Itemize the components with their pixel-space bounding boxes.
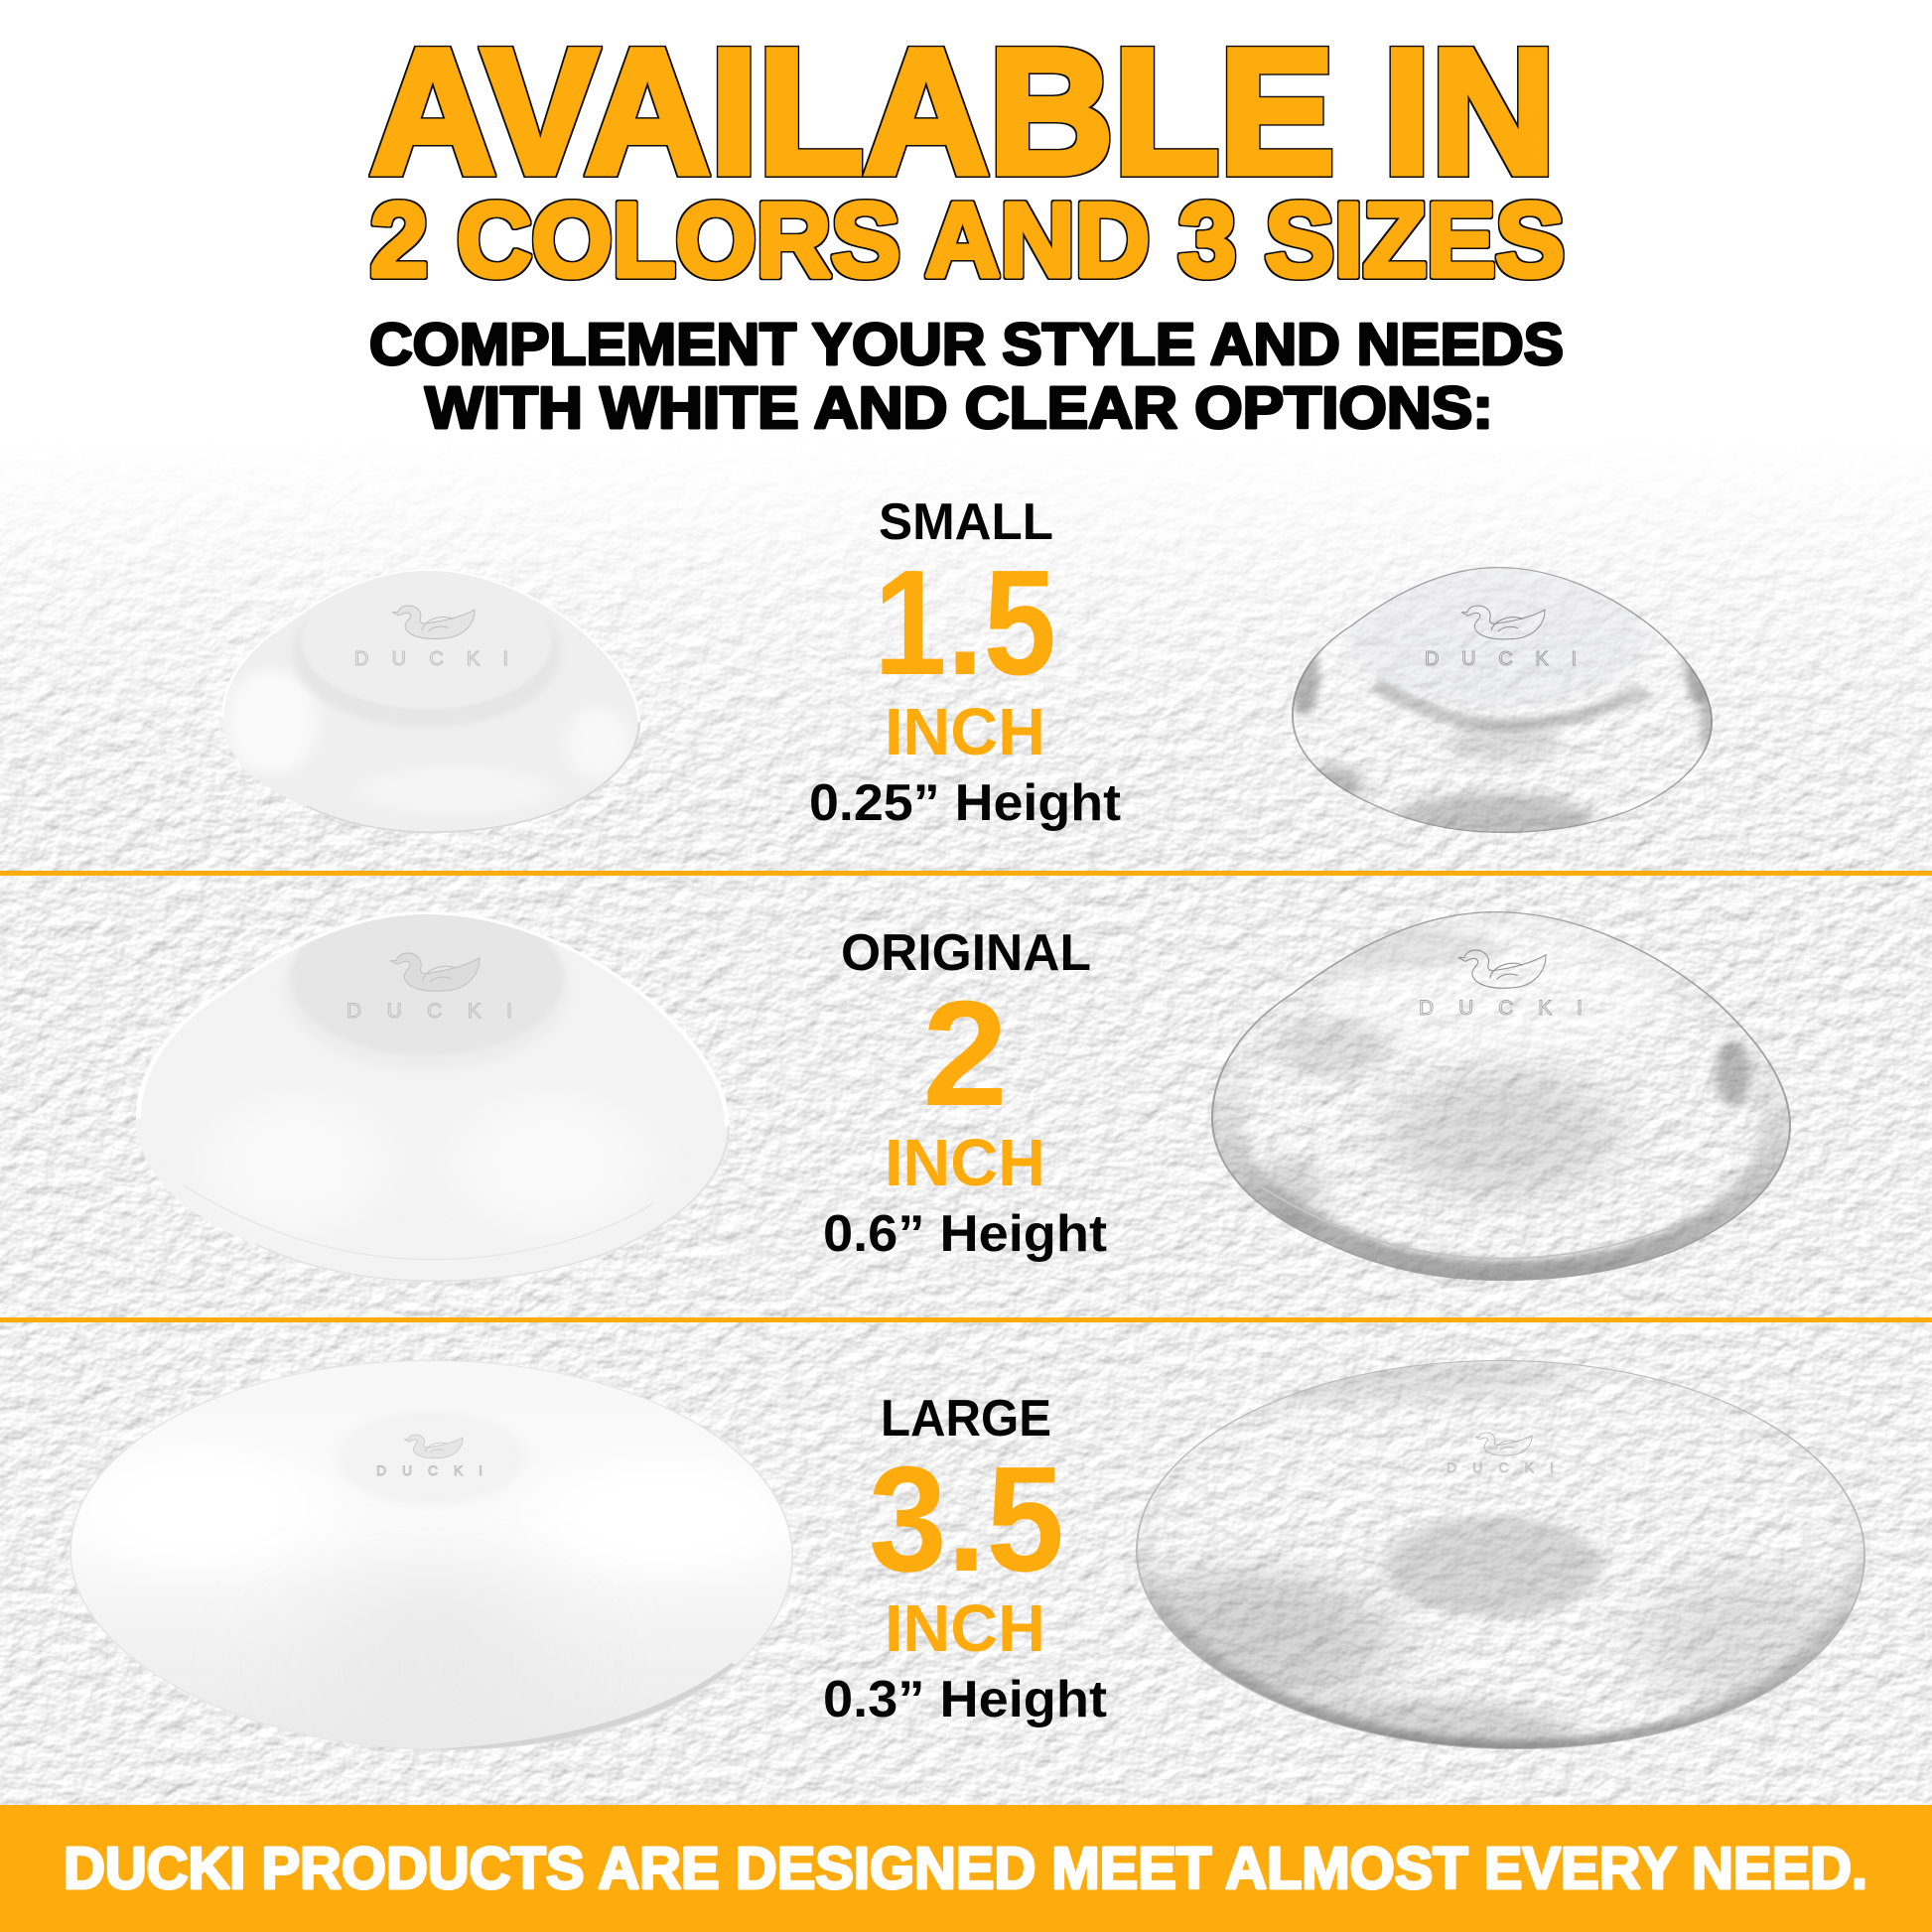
diameter number: 3.5 [869, 1435, 1064, 1602]
title [370, 12, 1565, 299]
panel: original size [136, 900, 1791, 1282]
icon: duck logo [1475, 1433, 1532, 1455]
logo wordmark: DUCKI [1425, 648, 1577, 670]
size name: ORIGINAL [841, 924, 1091, 982]
height: 0.3” Height [823, 1671, 1107, 1728]
icon: duck logo [390, 953, 480, 991]
banner text: DUCKI PRODUCTS ARE DESIGNED MEET ALMOST EVERY NEED. [64, 1836, 1867, 1901]
logo wordmark: DUCKI [376, 1462, 483, 1478]
heading: colors and sizes: 2 COLORS AND 3 SIZES [370, 182, 1565, 299]
icon: duck logo [404, 1435, 463, 1458]
size label: small [809, 493, 1121, 832]
diameter number: 2 [922, 969, 1008, 1137]
product: original clear bumper [1211, 911, 1791, 1281]
product: small white bumper [221, 569, 640, 833]
product: large clear bumper [1136, 1360, 1865, 1749]
product: original white bumper [136, 900, 730, 1282]
panel: small size [221, 493, 1725, 852]
logo wordmark: DUCKI [1447, 1459, 1554, 1475]
logo wordmark: DUCKI [354, 648, 508, 670]
logo wordmark: DUCKI [346, 1000, 512, 1023]
size label: original [823, 924, 1107, 1263]
subtitle [369, 312, 1564, 441]
panel: large size [69, 1356, 1865, 1769]
height: 0.25” Height [809, 774, 1121, 832]
size label: large [823, 1390, 1107, 1728]
subtitle: COMPLEMENT YOUR STYLE AND NEEDS [369, 312, 1564, 377]
unit: INCH [885, 695, 1045, 769]
heading: available in: AVAILABLE IN [370, 12, 1556, 210]
icon: duck logo [1458, 950, 1546, 988]
footer banner [0, 1805, 1932, 1932]
diameter number: 1.5 [874, 538, 1056, 706]
unit: INCH [885, 1126, 1045, 1200]
logo wordmark: DUCKI [1419, 997, 1583, 1020]
icon: duck logo [392, 606, 475, 638]
unit: INCH [885, 1591, 1045, 1666]
icon: duck logo [1461, 606, 1545, 639]
divider lines [0, 871, 1932, 1322]
subtitle: WITH WHITE AND CLEAR OPTIONS: [425, 375, 1493, 441]
product: small clear bumper [1292, 567, 1713, 833]
product: large white bumper [69, 1360, 793, 1766]
size name: LARGE [881, 1390, 1051, 1448]
size name: SMALL [879, 493, 1053, 551]
height: 0.6” Height [823, 1205, 1107, 1263]
